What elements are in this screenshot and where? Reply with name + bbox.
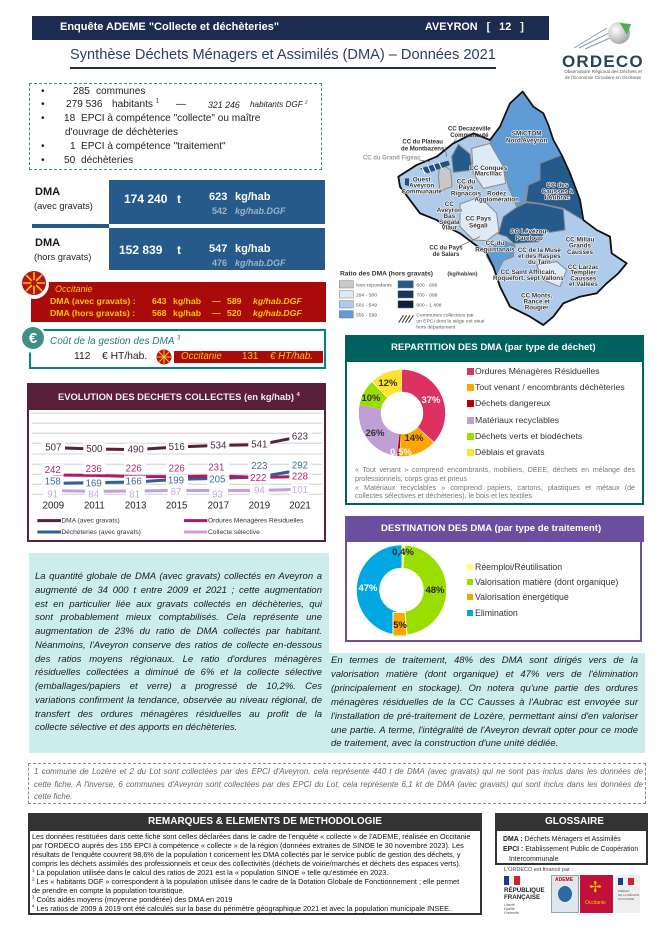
legend: Elimination (475, 608, 518, 618)
cost heading: Coût de la gestion des DMA 3 (50, 336, 180, 347)
panel: DMA without rubble: 547 (209, 243, 227, 255)
line chart: 2019 (249, 501, 270, 512)
map of Aveyron: Rance et (523, 298, 551, 305)
commentary text: (emballages/papiers et verre) a progressé de 10,2%. Ces (35, 681, 322, 692)
donut chart: waste types (358, 370, 446, 458)
key figures text: 18 (64, 113, 75, 124)
line chart: 507 (45, 443, 61, 454)
line chart: 541 (251, 440, 267, 451)
panel: Occitanie comparison: 589 (227, 296, 242, 306)
map of Aveyron: et Vallées (569, 281, 598, 288)
map of Aveyron: de Montbazens (401, 146, 445, 152)
line chart: DMA (avec gravats) (61, 518, 120, 525)
line chart: 87 (171, 487, 181, 498)
remarks text (32, 832, 470, 913)
line chart: 81 (129, 490, 140, 501)
map of Aveyron: CC Saint Affricain, (501, 269, 556, 276)
panel heading: DESTINATION DES DMA (par type de traitement) (381, 523, 601, 534)
key figures text: 321 246 (208, 100, 240, 110)
map of Aveyron: CC du (457, 178, 475, 185)
line chart: 199 (168, 476, 184, 487)
map of Aveyron: Réquistanais (475, 247, 515, 254)
logo: prefecture (615, 875, 640, 913)
panel: Occitanie comparison: kg/hab.DGF (253, 296, 302, 306)
donut chart: treatment: 0,4% (392, 547, 414, 558)
panel: DMA with rubble: kg/hab (235, 191, 270, 203)
key figures text: communes (96, 86, 145, 97)
map of Aveyron: CC (445, 201, 454, 208)
definitions note: collectes sélectives et déchèteries), le bois et les textiles (355, 492, 532, 500)
ORDECO logo: ORDECO (562, 52, 644, 71)
panel: Occitanie comparison: DMA (avec gravats) : (50, 296, 136, 306)
map of Aveyron: Causses (567, 249, 593, 256)
logo: ADEME (551, 875, 579, 913)
panel: cost of management: € HT/hab. (102, 351, 147, 362)
panel heading (345, 335, 644, 362)
line chart: 2009 (43, 501, 64, 512)
map of Aveyron: Grands (569, 243, 592, 250)
title: Synthèse Déchets Ménagers et Assimilés (DMA) – Données 2021 (70, 47, 496, 63)
map legend: 501 - 549 (356, 302, 377, 308)
header bar (32, 16, 549, 40)
map of Aveyron: l'Aubrac (545, 194, 570, 201)
map of Aveyron: Pareloup (516, 235, 543, 242)
remarks text: Les données restituées dans cette fiche sont celles déclarées dans le cadre de l'enquête « collecte » de l'ADEME, réalisée en Occitanie (32, 832, 470, 841)
panel: DMA with rubble: 542 (212, 206, 227, 216)
survey label: Enquête ADEME "Collecte et déchèteries" (60, 21, 279, 33)
line chart: 2021 (289, 501, 311, 512)
legend: Déchets dangereux (475, 398, 550, 408)
panel: Occitanie comparison: kg/hab.DGF (253, 308, 302, 318)
map of Aveyron: CC Millau (566, 237, 595, 244)
legend: Valorisation énergétique (475, 592, 569, 602)
remarks heading (28, 813, 482, 831)
panel: Occitanie comparison: kg/hab (173, 296, 201, 306)
commentary text: augmenté de 34 000 t entre 2009 et 2021 ; cette augmentation (35, 585, 322, 596)
Occitanie cost band: 131 (242, 351, 258, 362)
map of Aveyron: CC des (546, 182, 569, 189)
donut chart: waste types: 12% (378, 378, 398, 389)
icon: Occitanie cross (22, 271, 49, 299)
commentary text: Néanmoins, l'Aveyron conserve des ratios de collecte en-dessous (35, 640, 322, 651)
line chart: 500 (86, 444, 102, 455)
remarks text: 3 Coûts aidés moyens (moyenne pondérée) des DMA en 2019 (32, 894, 232, 904)
Occitanie label: Occitanie (55, 284, 93, 294)
panel: DMA with rubble: (avec gravats) (34, 201, 93, 211)
key figures text: 285 (73, 86, 90, 97)
line chart: 2011 (84, 501, 105, 512)
line chart: 534 (210, 441, 227, 452)
ORDECO logo (562, 22, 644, 80)
line chart: Collecte sélective (208, 529, 260, 536)
legend: Valorisation matière (dont organique) (475, 577, 618, 587)
panel: DMA without rubble: DMA (35, 237, 60, 249)
glossary text: Intercommunale (509, 856, 558, 863)
line chart: 94 (254, 486, 265, 497)
logo: République Française: Égalité (504, 907, 515, 911)
map of Aveyron: Ouest (413, 176, 432, 183)
treatment text: une partie. A terme, l'intégralité de l'Aveyron devrait opter pour ce mode (331, 725, 638, 736)
definitions note: professionnels, corps gras et pneus (355, 475, 467, 483)
note box (28, 763, 646, 804)
panel: DMA with rubble: DMA (35, 186, 60, 198)
glossary heading (495, 813, 648, 831)
remarks text: compris les déchets assimilés des professionnels et ceux des collectivités (déchets de voirie/marchés et déchets des espaces verts). (32, 859, 461, 868)
map of Aveyron: SMICTOM (512, 130, 542, 137)
map of Aveyron: CC Lévézou- (510, 228, 548, 235)
definitions note: « Tout venant » comprend encombrants, mobiliers, DEEE, déchets en mélange des (355, 466, 635, 474)
map of Aveyron: du Tarn (528, 259, 551, 266)
legend: Déblais et gravats (475, 447, 545, 457)
legend (467, 562, 618, 618)
commentary text: résiduelles collectées a diminué de 6% et la collecte sélective (35, 667, 322, 678)
logo: République Française: RÉPUBLIQUE (504, 887, 545, 894)
map of Aveyron: Roquefort, sept Vallons (493, 275, 564, 282)
donut chart: treatment: 5% (393, 620, 407, 631)
line chart: 516 (169, 442, 185, 453)
logo: République Française: FRANÇAISE (504, 894, 540, 901)
key figures text: • (41, 113, 45, 124)
note box: cette fiche. A l'inverse, 6 communes d'Aveyron sont collectées par des EPCI du Lot, cela représente 6,1 kt de DMA (avec gravats) qui sont inclus dans les données de (34, 780, 643, 788)
remarks text: 1 La population utilisée dans le calcul des ratios de 2021 est la « population SINOE » telle qu'estimée en 2023. (32, 867, 388, 877)
logo: ADEME: ADEME (555, 877, 573, 883)
legend (467, 366, 625, 457)
map legend: Non-répondants (356, 282, 392, 288)
panel heading (345, 516, 644, 542)
logo: République Française: Fraternité (504, 911, 519, 915)
donut chart: waste types: 14% (404, 433, 424, 444)
map of Aveyron: Templier (570, 270, 597, 277)
map of Aveyron: Viaur (441, 224, 458, 231)
panel heading: REPARTITION DES DMA (par type de déchet) (391, 342, 596, 353)
donut chart: waste types: 26% (365, 428, 385, 439)
map of Aveyron: CC du (486, 240, 504, 247)
ORDECO logo: Observatoire Régional des Déchets et (564, 69, 642, 74)
remarks heading: REMARQUES & ELEMENTS DE METHODOLOGIE (148, 816, 382, 827)
map of Aveyron: Causses (570, 275, 597, 282)
Occitanie cost band: € HT/hab. (270, 351, 313, 362)
line chart: 93 (212, 490, 223, 501)
key figures text: d'ouvrage de déchèteries (65, 127, 178, 138)
key figures text: • (41, 99, 45, 110)
map of Aveyron: Agglomération (474, 197, 519, 204)
panel: DMA without rubble: t (177, 243, 181, 257)
panel: DMA with rubble: 623 (209, 191, 227, 203)
map legend: 600 - 699 (416, 282, 438, 288)
panel: Occitanie comparison: 520 (227, 308, 242, 318)
line chart: 242 (45, 465, 61, 476)
map of Aveyron: Rougier (525, 304, 549, 311)
panel: commentary left (29, 553, 329, 753)
map of Aveyron: Marcillac (475, 170, 502, 177)
key figures text: habitants 1 (112, 99, 159, 110)
commentary text: La quantité globale de DMA (avec gravats) collectés en Aveyron a (35, 571, 322, 582)
treatment text: valorisation matière (dont organique) et 47% vers de l'élimination (331, 669, 638, 680)
key figures text: — (176, 99, 186, 110)
map of Aveyron: CC Conques (469, 165, 508, 172)
line chart: 623 (292, 432, 308, 443)
panel: DMA with rubble: kg/hab.DGF (235, 206, 286, 216)
treatment text: de traitement, avec la construction d'une unité dédiée. (331, 738, 558, 749)
definitions note: « Matériaux recyclables » comprend papiers, cartons, plastiques et métaux (de (355, 484, 635, 492)
panel: glossary (495, 813, 648, 865)
ORDECO logo: de l'Economie Circulaire en Occitanie (565, 75, 641, 80)
legend: Réemploi/Réutilisation (475, 562, 562, 572)
map of Aveyron: CC du Pays (429, 245, 463, 251)
treatment text: En termes de traitement, 48% des DMA sont dirigés vers de la (331, 655, 638, 666)
map of Aveyron: CC Pays (465, 216, 492, 223)
map of Aveyron: Communauté (450, 133, 489, 139)
legend: Tout venant / encombrants déchèteries (475, 382, 625, 392)
funders caption: L'ORDECO est financé par : (504, 867, 573, 873)
map of Aveyron: Pays (459, 184, 474, 191)
panel: cost of management (29, 329, 326, 369)
legend: Ordures Ménagères Résiduelles (475, 366, 600, 376)
line chart: 2013 (125, 501, 146, 512)
department label: AVEYRON [ 12 ] (425, 21, 524, 33)
commentary text: sont probablement mieux comptabilisés. Cela représente une (35, 612, 322, 623)
map of Aveyron: CC Decazeville (448, 127, 491, 133)
line chart: Déchèteries (avec gravats) (61, 529, 141, 536)
panel: breakdown by waste type (345, 335, 644, 505)
map of Aveyron: CC Larzac (568, 264, 599, 271)
key figures text: 279 536 (66, 99, 102, 110)
map of Aveyron: Causses à (542, 188, 573, 195)
panel: Occitanie comparison: — (212, 308, 221, 318)
panel: DMA with rubble (32, 180, 325, 228)
definitions note (355, 466, 635, 500)
panel: Occitanie comparison: — (212, 296, 221, 306)
key figures text: déchèteries (81, 155, 133, 166)
glossary text: EPCI : Etablissement Public de Coopération (503, 846, 638, 853)
line chart: 158 (45, 477, 61, 488)
donut chart: treatment (356, 545, 446, 636)
key figures text: EPCI à compétence "traitement" (81, 141, 226, 152)
line chart: 84 (88, 490, 100, 501)
chart heading (27, 383, 326, 410)
line chart: 2015 (166, 501, 187, 512)
key figures text: • (41, 86, 45, 97)
logo: prefecture: PRÉFET (618, 889, 630, 893)
map legend: 550 - 599 (356, 312, 377, 318)
map of Aveyron: Rodez (487, 190, 506, 197)
map legend: 700 - 899 (416, 292, 438, 298)
line chart: 2017 (208, 501, 229, 512)
map legend: Ratio des DMA (hors gravats) (340, 271, 433, 278)
icon: euro (22, 327, 172, 364)
panel: DMA without rubble: 152 839 (119, 243, 162, 257)
map legend (339, 271, 485, 330)
logo: prefecture: OCCITANIE (618, 897, 634, 901)
treatment text: l'installation de pré-traitement de Lozère, permettant ainsi d'en valoriser (331, 711, 638, 722)
Occitanie cost band: Occitanie (181, 351, 222, 362)
line chart: 490 (128, 445, 144, 456)
line chart: 101 (292, 485, 308, 496)
panel: DMA with rubble: t (177, 192, 181, 206)
key figures text: • (41, 141, 45, 152)
commentary text: des ratios moyens régionaux. Le ratio d'ordures ménagères (35, 654, 322, 664)
note box: 1 commune de Lozère et 2 du Lot sont collectées par des EPCI d'Aveyron, cela représente 440 t de DMA (avec gravats) qui ne sont pas inclus dans les données de (34, 767, 643, 776)
cost value: 112 (74, 351, 90, 362)
Occitanie cost band (174, 351, 323, 363)
note box: cette fiche. (34, 792, 72, 801)
line chart: 166 (126, 477, 142, 488)
map of Aveyron (339, 90, 628, 330)
glossary text: DMA : Déchets Ménagers et Assimilés (503, 836, 621, 843)
line chart: 236 (86, 464, 102, 475)
map of Aveyron: CC de la Muse (518, 247, 561, 254)
panel: DMA without rubble: (hors gravats) (34, 252, 91, 262)
map of Aveyron: de Salars (433, 252, 460, 258)
treatment text: (principalement en stockage). On notera qu'une partie des ordures (331, 683, 638, 694)
map of Aveyron: Rignacois (451, 190, 482, 197)
logo: Région Occitanie: ✢ (589, 879, 602, 896)
line chart: 228 (292, 472, 308, 483)
key figures text: 1 (70, 141, 76, 152)
map of Aveyron: CC Monts, (521, 292, 553, 299)
line chart: 169 (86, 479, 102, 490)
legend: Déchets verts et biodéchets (475, 431, 582, 441)
panel: Occitanie comparison: 568 (152, 308, 166, 318)
glossary text (503, 836, 638, 863)
line chart: 91 (47, 490, 58, 501)
remarks text: 2 Les « habitants DGF » correspondent à la population utilisée dans le cadre de la Dotation Globale de Fonctionnement ; elle permet (32, 876, 459, 886)
panel: Occitanie comparison: DMA (hors gravats) : (50, 308, 135, 318)
panel: Occitanie comparison: kg/hab (173, 308, 201, 318)
map of Aveyron: Aveyron (409, 182, 434, 189)
line chart: 292 (292, 461, 308, 472)
panel: DMA without rubble: kg/hab (235, 243, 270, 255)
donut chart: waste types: 0,5% (390, 447, 412, 458)
map of Aveyron: Ségali (469, 222, 488, 229)
map legend: Communes collectées par (416, 313, 474, 319)
panel: DMA with rubble: 174 240 (124, 192, 167, 206)
map of Aveyron: Aveyron (437, 207, 462, 214)
commentary text: collecte sélective et des apports en déchèteries. (35, 722, 237, 733)
remarks text: résultats de l'enquête couvrent 98,6% de la population t concernent les DMA collectés par le service public de gestion des déchets, y (32, 850, 461, 859)
commentary text: variations confirment la tendance, observée au niveau régional, de (35, 695, 322, 706)
panel: DMA without rubble: 476 (212, 258, 227, 268)
panel: treatment destination (345, 516, 642, 642)
line chart: 226 (126, 464, 142, 475)
treatment text: ménagères résiduelles de la CC Causses à l'Aubrac est envoyée sur (331, 697, 638, 708)
panel: evolution chart (27, 383, 326, 542)
line chart: Ordures Ménagères Résiduelles (208, 518, 304, 525)
panel: Occitanie comparison: 643 (152, 296, 166, 306)
line chart: 226 (169, 464, 185, 475)
logo: prefecture: DE LA RÉGION (618, 893, 639, 897)
key figures text (41, 86, 308, 166)
map of Aveyron: Bas (444, 213, 456, 220)
panel: DMA without rubble: kg/hab.DGF (235, 258, 286, 268)
remarks text: 4 Les ratios de 2009 à 2019 ont été calculés sur la base du périmètre géographique 2021 et avec la population municipale INSEE. (32, 903, 451, 913)
map of Aveyron: Nord Aveyron (506, 137, 547, 144)
panel: Occitanie comparison (31, 282, 326, 322)
map of Aveyron: Communauté (401, 188, 442, 195)
panel: remarks and methodology (28, 813, 482, 915)
funders logos (504, 867, 640, 915)
key figures text: habitants DGF 2 (250, 100, 308, 109)
icon: euro: € (29, 330, 38, 347)
map legend: 294 - 500 (356, 292, 377, 298)
logo: Région Occitanie (580, 875, 613, 913)
map of Aveyron: et des Raspes (518, 253, 561, 260)
commentary text: transfert des ordures ménagères résiduelles au profit de la (35, 708, 322, 720)
commentary text: augmentation de 23% du ratio de DMA collectés par habitant. (35, 626, 322, 637)
key figures text: 50 (64, 155, 75, 166)
logo: République Française (504, 876, 545, 915)
panel: DMA without rubble (34, 228, 325, 270)
key figures text: EPCI à compétence "collecte" ou maître (81, 113, 260, 124)
map legend: un EPCI dont le siège est situé (416, 318, 485, 324)
map legend: (kg/hab/an) (447, 272, 478, 278)
remarks text: de prendre en compte la population touristique. (32, 886, 185, 895)
line chart: 222 (250, 473, 266, 484)
donut chart: treatment: 47% (358, 583, 378, 594)
map legend: hors département (416, 324, 456, 330)
line chart: 223 (251, 461, 267, 472)
donut chart: waste types: 10% (361, 393, 381, 404)
commentary text: est en particulier liée aux gravats collectés en déchèteries, qui (35, 598, 322, 610)
map legend: 900 - 1 408 (416, 302, 442, 308)
treatment text (331, 655, 638, 749)
legend: Matériaux recyclables (475, 415, 559, 425)
line chart: 231 (208, 463, 224, 474)
logo: Région Occitanie: Occitanie (585, 900, 606, 906)
chart heading: EVOLUTION DES DECHETS COLLECTES (en kg/hab) 4 (58, 391, 300, 402)
donut chart: treatment: 48% (425, 585, 445, 596)
panel: commentary right (329, 653, 645, 753)
remarks text: par l'ORDECO auprès des 155 EPCI à compétence « collecte » de la région (données extraites de SINOE le 30 novembre 2023). Les (32, 841, 464, 850)
commentary text (35, 571, 322, 733)
key figures box (29, 83, 322, 170)
key figures text: • (41, 155, 45, 166)
logo: République Française: Liberté (504, 903, 515, 907)
map of Aveyron: Ségala (439, 219, 460, 226)
glossary heading: GLOSSAIRE (545, 816, 604, 827)
line chart: 205 (209, 475, 225, 486)
donut chart: waste types: 37% (421, 395, 441, 406)
map of Aveyron: CC du Grand Figeac (363, 156, 421, 162)
map of Aveyron: CC du Plateau (402, 139, 443, 145)
